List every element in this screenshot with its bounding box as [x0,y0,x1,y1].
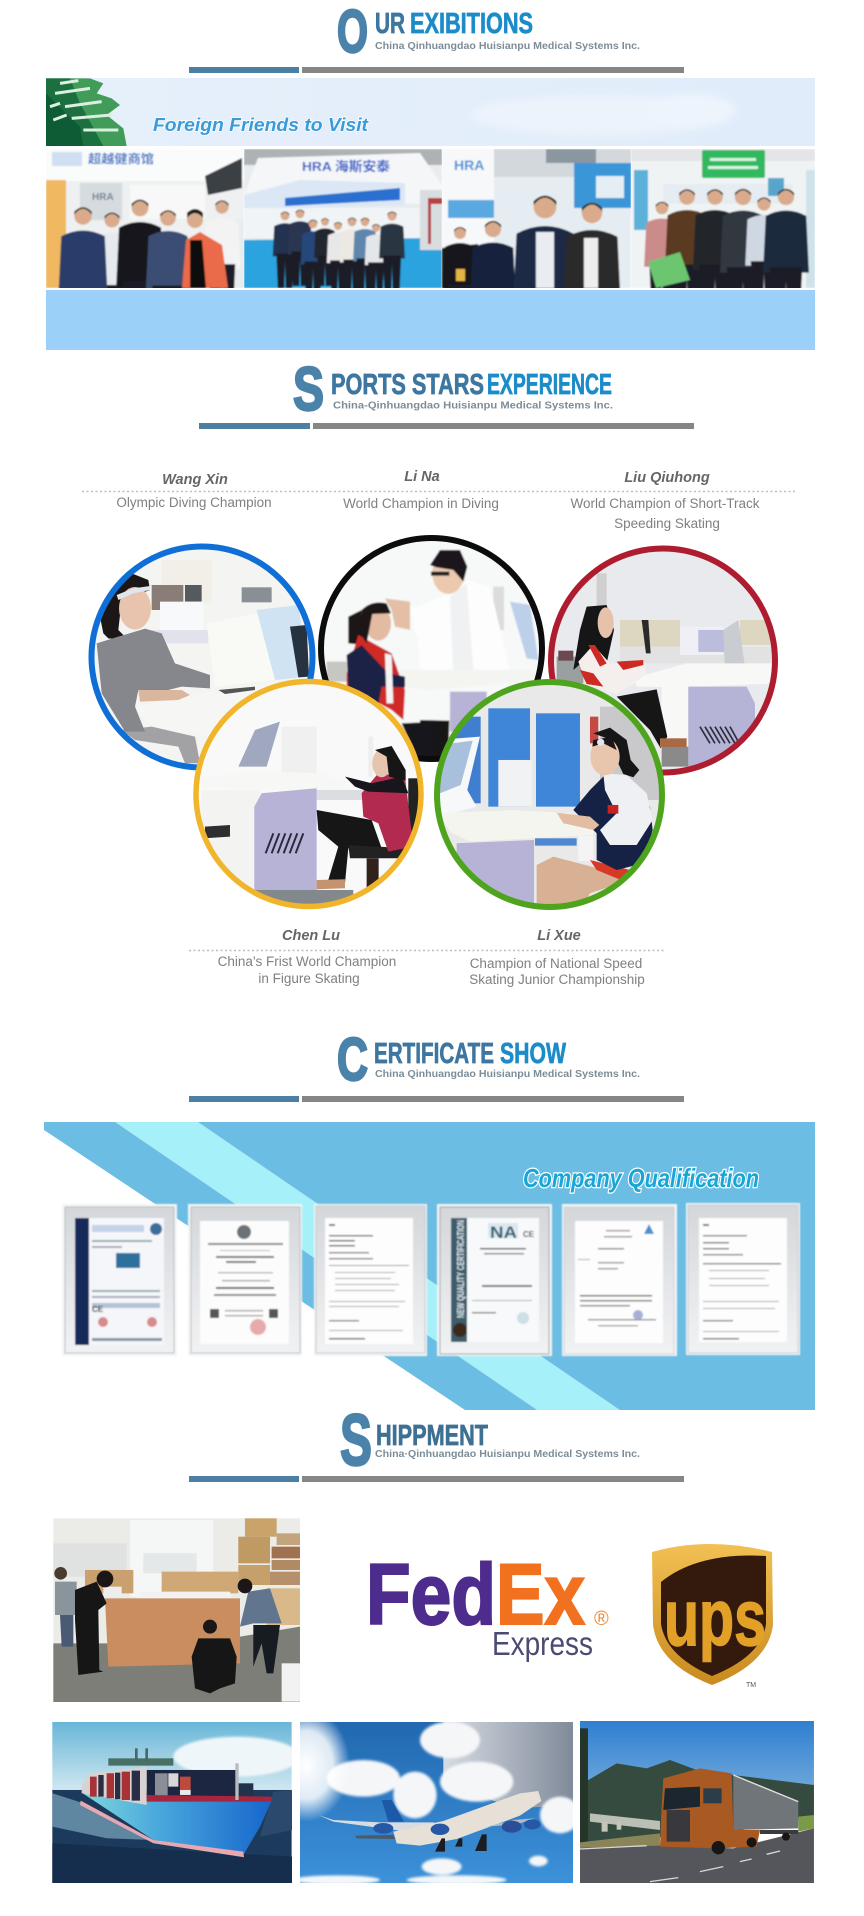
logo: UPS shield: TM [746,1682,756,1689]
heading: Shippment: China·Qinhuangdao Huisianpu Medical Systems Inc. [375,1449,640,1460]
heading: Sports Stars Experience: China-Qinhuangdao Huisianpu Medical Systems Inc. [333,400,613,412]
woman seated, drawn at left half [326,598,422,756]
text block: bottom athlete captions [189,928,665,987]
heading: Shippment: HIPPMENT [376,1420,488,1452]
banner title: Foreign Friends to Visit [153,114,369,135]
icon: tropical leaf [46,78,127,146]
heading: Certificate Show: SHOW [500,1038,566,1070]
logo: UPS shield: ups [664,1573,766,1662]
heading: Sports Stars Experience: PORTS STARS [331,369,484,401]
heading: Shippment [340,1401,640,1481]
photo: exhibition booth 3: HRA [454,157,484,173]
logo: UPS shield [652,1544,773,1689]
photo: exhibition booth 2: HRA 海斯安泰 [302,159,390,174]
man in white coat and equipment, drawn at right half [419,549,538,756]
logo: FedEx Express: Fed [366,1547,496,1643]
caption: Liu Qiuhong [570,470,760,531]
photo: exhibition booth 1: 超越健商馆 [88,151,154,166]
photo circles: athletes [85,530,783,913]
heading: Shippment: S [340,1401,372,1481]
photo: container ship [52,1722,300,1883]
caption: Li Na: Li Na [404,469,440,485]
heading: Sports Stars Experience [293,355,613,423]
certificate 1: CE [92,1305,104,1314]
caption: Liu Qiuhong: World Champion of Short-Track [570,496,760,511]
circle photo: black ring [315,530,550,765]
caption: Chen Lu [218,928,396,986]
logo: FedEx Express: Express [492,1625,593,1662]
circle photo: red ring [543,543,783,780]
heading: Sports Stars Experience: S [293,355,324,423]
certificate 4: NEW QUALITY CERTIFICATION [456,1220,467,1318]
caption: Li Xue: Champion of National Speed [470,956,642,971]
heading: Certificate Show [337,1026,640,1093]
text block: top athlete captions [82,469,797,531]
certificate 5 [562,1204,677,1356]
divider bars: sports stars [199,423,694,429]
certificate 1 [62,1204,177,1356]
photo: exhibition booth 3 [442,149,631,288]
caption: Chen Lu: China's Frist World Champion [218,954,396,969]
heading: Our Exibitions: O [337,0,368,65]
caption: Chen Lu: in Figure Skating [258,971,360,986]
heading: Certificate Show: ERTIFICATE [374,1038,494,1070]
heading: Our Exibitions [337,0,640,65]
logo: FedEx Express: Ex [496,1547,585,1643]
photo: workers packing wooden crate [53,1518,300,1702]
caption: Li Na: World Champion in Diving [343,496,499,511]
divider bars: certificates [189,1096,684,1102]
certificate 4: NA [490,1223,517,1242]
caption: Liu Qiuhong: Liu Qiuhong [624,470,710,486]
photo: exhibition booth 1: HRA [92,192,114,203]
caption: Wang Xin [116,472,272,510]
photo: exhibition booth 2 [244,149,442,296]
panel: light blue strip [46,290,815,350]
divider bars: shipment [189,1476,684,1482]
heading: Our Exibitions: EXIBITIONS [410,8,533,40]
panel: company qualification [44,1122,815,1410]
caption: Liu Qiuhong: Speeding Skating [614,516,720,531]
certificate 6 [686,1203,800,1355]
circle photo: blue ring [85,540,318,773]
caption: Chen Lu: Chen Lu [282,928,340,944]
heading: Certificate Show: China Qinhuangdao Huisianpu Medical Systems Inc. [375,1069,640,1080]
certificate 2 [188,1204,302,1356]
circle photo: yellow ring [192,677,425,913]
logo: FedEx Express: ® [594,1608,609,1630]
caption: Li Xue: Li Xue [537,928,581,944]
certificate 3 [314,1204,427,1356]
panel title: Company Qualification [523,1163,759,1193]
caption: Wang Xin: Olympic Diving Champion [116,495,272,510]
caption: Wang Xin: Wang Xin [162,472,228,488]
circle photo: green ring [430,677,670,913]
certificate 4 [437,1204,552,1356]
heading: Our Exibitions: China Qinhuangdao Huisianpu Medical Systems Inc. [375,41,640,52]
certificate 4: CE [523,1230,535,1239]
caption: Li Na [343,469,499,511]
photo: exhibition booth 4 [631,149,815,288]
heading: Our Exibitions: UR [375,8,405,40]
panel: foreign friends banner [46,78,815,146]
heading: Sports Stars Experience: EXPERIENCE [487,369,612,401]
photo: exhibition booth 1 [46,151,244,288]
photo: orange truck on road [580,1721,814,1883]
caption: Li Xue: Skating Junior Championship [469,972,645,987]
heading: Certificate Show: C [337,1026,368,1093]
caption: Li Xue [469,928,645,987]
divider bars: exhibitions [189,67,684,73]
photo: airplane in cloudy sky [300,1722,573,1883]
logo: FedEx Express [366,1547,609,1662]
